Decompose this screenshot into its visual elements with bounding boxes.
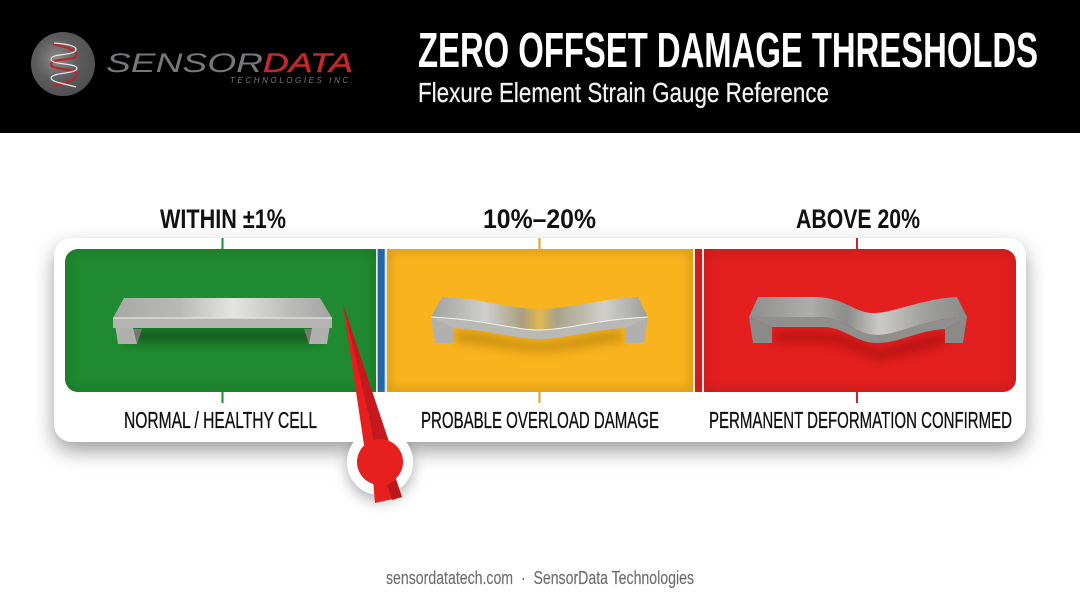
label: normal: NORMAL / HEALTHY CELL (124, 407, 317, 433)
heading: 10-20%: 10%–20% (483, 204, 596, 234)
heading: within 1%: WITHIN ±1% (160, 204, 286, 234)
flexure bar: slightly bent (431, 297, 648, 352)
zone: red (704, 249, 1016, 392)
header band (0, 0, 1080, 133)
gauge needle (343, 304, 413, 503)
tick marks (222, 238, 858, 403)
flexure bar: straight, healthy (113, 298, 332, 344)
logo orb icon (31, 32, 95, 96)
heading: above 20%: ABOVE 20% (796, 204, 920, 234)
zone band (65, 249, 1016, 392)
needle pointer (343, 304, 390, 445)
needle hub (357, 439, 403, 485)
footer: sensordatatech.com · SensorData Technologies (386, 568, 694, 588)
logo tagline: TECHNOLOGIES INC. (230, 76, 353, 85)
gauge card (54, 238, 1026, 442)
logo: SensorData Technologies (31, 32, 353, 96)
zone: green (65, 249, 376, 392)
threshold marker: white (695, 249, 702, 392)
needle hub shadow (347, 429, 413, 495)
logo wordmark: SENSOR (106, 48, 263, 78)
flexure bar: permanently deformed (749, 297, 967, 360)
label: probable overload: PROBABLE OVERLOAD DAMAGE (421, 407, 659, 433)
needle hub backing (347, 429, 413, 495)
threshold marker: blue (378, 249, 385, 392)
logo: SensorData Technologies: DATA (263, 48, 353, 78)
subtitle: Flexure Element Strain Gauge Reference (418, 77, 829, 108)
zone: yellow (387, 249, 693, 392)
needle tail (373, 476, 402, 503)
